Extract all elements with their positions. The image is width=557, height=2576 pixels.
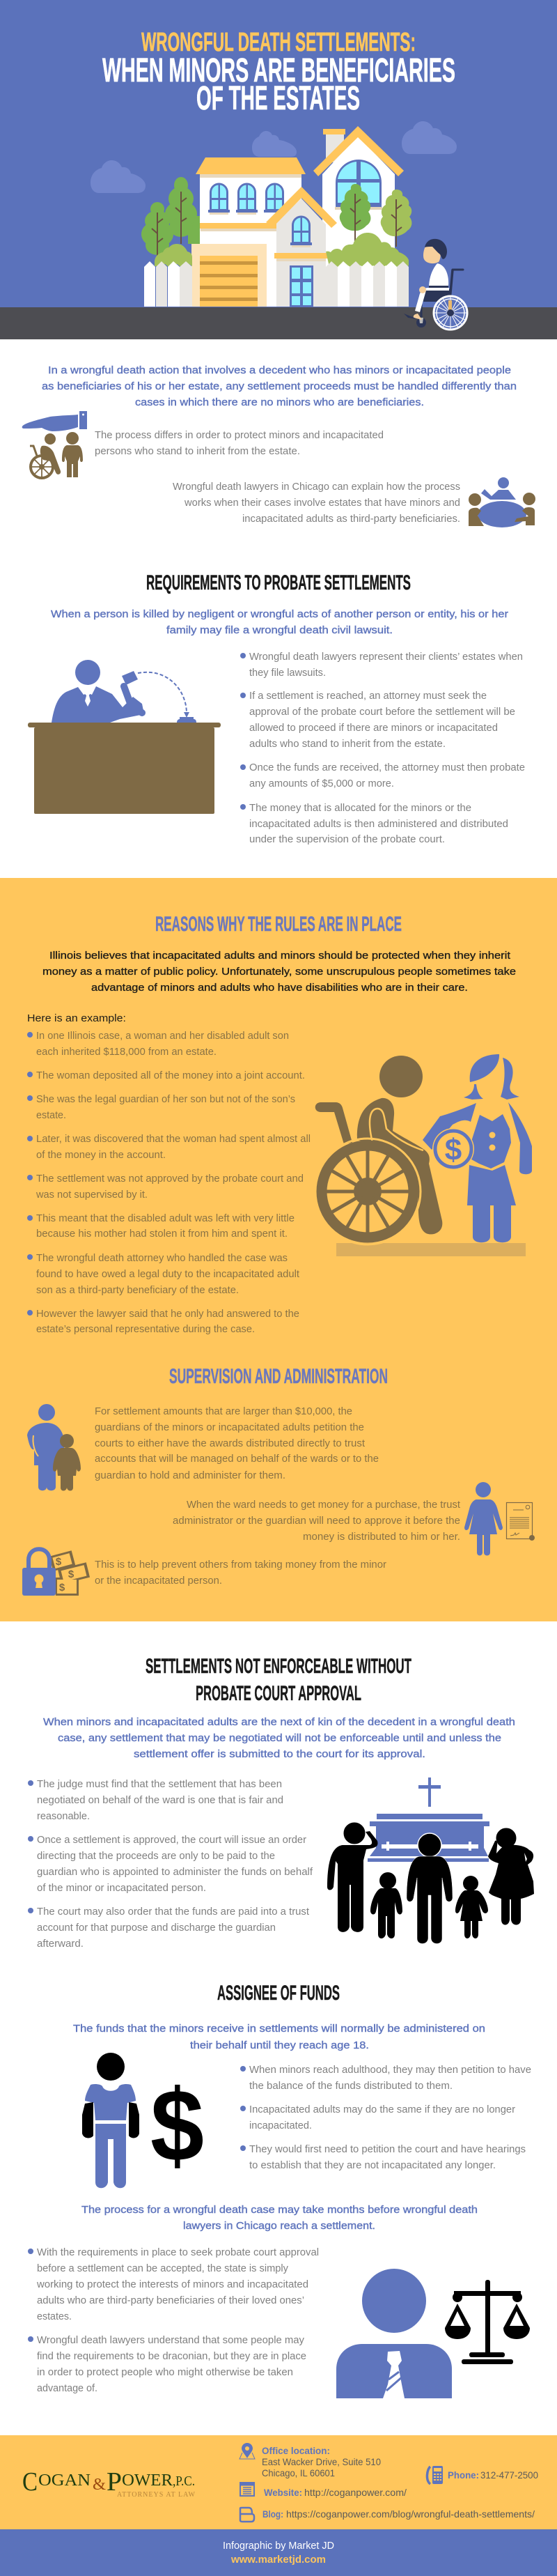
list: requirements: Wrongful death lawyers represent their clients’ estates when xyxy=(249,651,523,663)
road xyxy=(0,307,557,339)
list: adulthood xyxy=(240,2064,531,2171)
child left xyxy=(379,1872,396,1889)
list: adulthood: the balance of the funds distributed to them. xyxy=(249,2080,453,2092)
list: judge must find: account for that purpose and discharge the guardian xyxy=(37,1922,276,1934)
icon: person in wheelchair xyxy=(404,239,467,330)
main roof xyxy=(196,157,306,174)
list: requirements: allowed to proceed if there are minors or incapacitated xyxy=(249,722,498,734)
list: example xyxy=(27,1030,311,1335)
icon: website xyxy=(240,2482,255,2497)
icon: lock and money xyxy=(22,1549,90,1596)
text: website: http://coganpower.com/ xyxy=(304,2487,407,2498)
subheading: funds administered: The funds that the minors receive in settlements will normally be administered on xyxy=(73,2023,485,2035)
list: requirements: any amounts of $5,000 or more. xyxy=(249,778,394,789)
trees and bushes xyxy=(141,177,411,270)
door awning xyxy=(274,253,328,259)
list: example: The woman deposited all of the money into a joint account. xyxy=(36,1070,305,1081)
list: example: each inherited $118,000 from an estate. xyxy=(36,1046,217,1058)
icon: judge at bench xyxy=(28,660,221,814)
icon: blog xyxy=(240,2508,254,2522)
list: judge must find: The court may also order that the funds are paid into a trust xyxy=(37,1906,310,1918)
list: requirements in place: find the requirements to be draconian, but they are in place xyxy=(37,2350,306,2362)
list: example: Later, it was discovered that the woman had spent almost all xyxy=(36,1133,311,1145)
list: adulthood: Incapacitated adults may do the same if they are no longer xyxy=(249,2104,515,2115)
logo: P xyxy=(107,2467,122,2497)
logo: C xyxy=(22,2467,38,2497)
icon: hand protecting family xyxy=(22,411,87,478)
list: requirements in place: adults who are third-party beneficiaries of their loved ones’ xyxy=(37,2295,304,2306)
title xyxy=(102,28,455,117)
icon: lock and money: $ xyxy=(68,1568,74,1580)
text: ward needs money: When the ward needs to get money for a purchase, the trust xyxy=(187,1499,461,1511)
icon: clouds xyxy=(91,121,457,193)
list: example: found to have owed a legal duty to the incapacitated adult xyxy=(36,1268,300,1280)
logo: ,P.C. xyxy=(173,2474,195,2489)
text: phone: 312-477-2500 xyxy=(480,2469,538,2481)
icon: location pin xyxy=(240,2443,255,2459)
list: judge must find: The judge must find that the settlement that has been xyxy=(37,1778,282,1790)
intro statement xyxy=(42,364,517,408)
text: settlement amounts xyxy=(95,1405,379,1481)
man left xyxy=(343,1822,366,1844)
text: lawyers explain xyxy=(173,481,460,525)
man centre xyxy=(418,1833,441,1857)
logo: & xyxy=(93,2476,106,2494)
list: example: She was the legal guardian of her son but not of the son’s xyxy=(36,1093,295,1105)
statement: public policy xyxy=(42,950,516,994)
panel: credit bar xyxy=(0,2529,557,2576)
text: office location: East Wacker Drive, Suite 510 xyxy=(262,2456,381,2467)
man in wheelchair xyxy=(379,1056,423,1097)
list: judge must find: afterward. xyxy=(37,1938,84,1950)
list: example: was not supervised by it. xyxy=(36,1189,148,1201)
list: requirements in place: With the requirements in place to seek probate court approval xyxy=(37,2246,319,2258)
list: requirements: If a settlement is reached, an attorney must seek the xyxy=(249,690,487,702)
windows row xyxy=(208,183,285,215)
wheel xyxy=(315,1139,421,1244)
label: example: Here is an example: xyxy=(27,1012,126,1024)
heading: settlements not enforceable: PROBATE COURT APPROVAL xyxy=(196,1682,361,1705)
icon: phone xyxy=(427,2466,443,2484)
icon: lock and money: $ xyxy=(56,1556,62,1568)
list: example: of the money in the account. xyxy=(36,1149,166,1161)
statement: public policy: Illinois believes that incapacitated adults and minors should be protected when they inherit xyxy=(49,950,511,962)
list: judge must find xyxy=(28,1778,313,1950)
list: judge must find: directing that the proceeds are only to be paid to the xyxy=(37,1850,275,1862)
floor xyxy=(336,1243,526,1256)
text: office location: Chicago, IL 60601 xyxy=(262,2467,335,2478)
subheading: requirements: When a person is killed by negligent or wrongful acts of another person or entity, his or her xyxy=(51,608,508,620)
list: example: estate. xyxy=(36,1109,66,1121)
coffin xyxy=(377,1814,483,1819)
header panel xyxy=(0,0,557,339)
list: adulthood: They would first need to petition the court and have hearings xyxy=(249,2143,526,2155)
door xyxy=(290,265,313,307)
logo xyxy=(22,2467,196,2499)
big window xyxy=(336,160,382,207)
subheading: next of kin: case, any settlement that may be negotiated will not be enforceable until and unless the xyxy=(58,1732,501,1744)
list: requirements: incapacitated adults is then administered and distributed xyxy=(249,818,508,830)
list: requirements: approval of the probate court before the settlement will be xyxy=(249,706,515,718)
text: credit: Infographic by Market JD xyxy=(223,2540,334,2552)
text: ward needs money: administrator or the guardian will need to approve it before the xyxy=(173,1515,460,1527)
text: office location: Office location: xyxy=(262,2445,330,2456)
logo: OGAN xyxy=(38,2471,91,2490)
intro statement: as beneficiaries of his or her estate, any settlement proceeds must be handled differently than xyxy=(42,380,517,392)
body xyxy=(429,263,448,286)
subheading: next of kin: When minors and incapacitated adults are the next of kin of the decedent in a wrongful death xyxy=(43,1716,515,1728)
heading: assignee of funds: ASSIGNEE OF FUNDS xyxy=(217,1982,340,2005)
illustration: house xyxy=(191,126,404,307)
list: example: This meant that the disabled adult was left with very little xyxy=(36,1212,295,1224)
illustration: family at coffin xyxy=(327,1777,534,1944)
gable window xyxy=(292,216,311,243)
text: process differs xyxy=(95,429,384,457)
text: process differs: persons who stand to inherit from the estate. xyxy=(95,445,300,457)
subheading: requirements xyxy=(51,608,508,636)
heading: settlements not enforceable xyxy=(146,1655,411,1705)
text: phone xyxy=(448,2469,538,2481)
woman xyxy=(470,1054,499,1082)
panel: contact footer xyxy=(0,2435,557,2529)
list: requirements in place: advantage of. xyxy=(37,2382,97,2394)
text: blog: https://coganpower.com/blog/wrongful-death-settlements/ xyxy=(286,2508,535,2520)
list: requirements in place: working to protect the interests of minors and incapacitated xyxy=(36,2278,308,2290)
icon: child with dollar: $ xyxy=(150,2069,204,2183)
text: prevent others xyxy=(95,1559,386,1587)
statement: public policy: money as a matter of public policy. Unfortunately, some unscrupulous people sometimes take xyxy=(42,966,516,978)
list: judge must find: reasonable. xyxy=(37,1810,90,1822)
list: requirements in place: before a settlement can be accepted, the state is simply xyxy=(37,2262,288,2274)
text: office location xyxy=(262,2445,381,2478)
list: requirements in place xyxy=(28,2246,319,2394)
statement: public policy: advantage of minors and adults who have disabilities who are in their care. xyxy=(91,982,468,994)
icon: lock and money: $ xyxy=(59,1582,65,1594)
intro statement: cases in which there are no minors who are beneficiaries. xyxy=(135,396,424,408)
subheading: process takes months xyxy=(81,2204,478,2232)
text: lawyers explain: Wrongful death lawyers in Chicago can explain how the process xyxy=(173,481,460,493)
main wall xyxy=(200,174,301,307)
text: settlement amounts: accounts that will be managed on behalf of the wards or to the xyxy=(95,1453,379,1465)
list: example: son as a third-party beneficiary of the estate. xyxy=(36,1284,239,1296)
gable section xyxy=(276,199,326,307)
list: requirements: The money that is allocated for the minors or the xyxy=(249,802,471,814)
panel: reasons and supervision xyxy=(0,878,557,1621)
title: OF THE ESTATES xyxy=(196,80,360,117)
band xyxy=(197,223,276,229)
money bag xyxy=(432,1128,474,1170)
subheading: process takes months: lawyers in Chicago reach a settlement. xyxy=(183,2220,375,2232)
list: example: because his mother had stolen it from him and spent it. xyxy=(36,1228,288,1240)
chimney xyxy=(326,134,344,162)
icon: ward with document xyxy=(464,1482,535,1555)
icon: child with dollar xyxy=(82,2053,204,2188)
logo: ATTORNEYS AT LAW xyxy=(117,2491,196,2499)
icon: guardian and child xyxy=(27,1404,81,1491)
text: credit url: www.marketjd.com xyxy=(230,2554,326,2566)
list: adulthood: incapacitated. xyxy=(249,2120,312,2131)
garage xyxy=(191,244,267,307)
text: settlement amounts: guardian to hold and administer for them. xyxy=(95,1470,285,1481)
text: settlement amounts: courts to either have the awards distributed directly to trust xyxy=(95,1437,366,1449)
list: example: estate’s personal representative during the case. xyxy=(36,1323,255,1335)
subheading: next of kin xyxy=(43,1716,515,1760)
list: requirements xyxy=(240,651,525,845)
list: requirements: Once the funds are received, the attorney must then probate xyxy=(249,762,525,773)
text: lawyers explain: incapacitated adults as third-party beneficiaries. xyxy=(242,513,460,525)
subheading: process takes months: The process for a wrongful death case may take months before wrongful death xyxy=(81,2204,478,2216)
list: adulthood: When minors reach adulthood, they may then petition to have xyxy=(249,2064,531,2076)
text: phone: Phone: xyxy=(448,2469,479,2481)
text: website: Website: xyxy=(264,2487,302,2498)
icon: meeting table xyxy=(469,477,535,527)
intro statement: In a wrongful death action that involves a decedent who has minors or incapacitated people xyxy=(48,364,511,376)
heading: supervision: SUPERVISION AND ADMINISTRATION xyxy=(169,1365,388,1388)
list: example: However the lawyer said that he only had answered to the xyxy=(36,1308,299,1320)
text: prevent others: This is to help prevent others from taking money from the minor xyxy=(95,1559,386,1571)
list: requirements in place: Wrongful death lawyers understand that some people may xyxy=(37,2334,304,2346)
text: lawyers explain: works when their cases involve estates that have minors and xyxy=(184,497,460,509)
list: example: The wrongful death attorney who handled the case was xyxy=(36,1252,288,1264)
list: requirements in place: estates. xyxy=(37,2311,72,2322)
tower wall xyxy=(322,136,395,279)
child right xyxy=(463,1876,478,1891)
illustration: guardian and disabled son xyxy=(315,1054,532,1256)
list: requirements: adults who stand to inherit from the estate. xyxy=(249,738,446,750)
list: requirements in place: in order to protect people who might otherwise be taken xyxy=(37,2366,293,2378)
list: judge must find: of the minor or incapacitated person. xyxy=(37,1882,206,1894)
head xyxy=(423,244,441,263)
icon: lawyer and scales xyxy=(336,2269,530,2398)
text: process differs: The process differs in order to protect minors and incapacitated xyxy=(95,429,384,441)
logo: OWER xyxy=(122,2471,173,2490)
subheading: requirements: family may file a wrongful death civil lawsuit. xyxy=(166,624,393,636)
list: adulthood: to establish that they are not incapacitated any longer. xyxy=(249,2159,496,2171)
subheading: next of kin: settlement offer is submitted to the court for its approval. xyxy=(134,1748,425,1760)
text: ward needs money: money is distributed to him or her. xyxy=(303,1531,460,1543)
list: example: The settlement was not approved by the probate court and xyxy=(36,1173,304,1185)
text: prevent others: or the incapacitated person. xyxy=(95,1575,222,1587)
list: judge must find: negotiated on behalf of the ward is one that is fair and xyxy=(37,1794,283,1806)
text: ward needs money xyxy=(173,1499,461,1543)
text: settlement amounts: guardians of the minors or incapacitated adults petition the xyxy=(95,1421,364,1433)
wheel xyxy=(434,296,467,330)
subheading: funds administered: their behalf until they reach age 18. xyxy=(190,2039,369,2051)
cross xyxy=(418,1777,441,1807)
list: judge must find: Once a settlement is approved, the court will issue an order xyxy=(37,1834,306,1846)
text: settlement amounts: For settlement amounts that are larger than $10,000, the xyxy=(95,1405,352,1417)
text: blog: Blog: xyxy=(262,2508,283,2520)
illustration: guardian and disabled son: $ xyxy=(445,1133,462,1167)
woman right xyxy=(496,1828,517,1849)
list: judge must find: guardian who is appointed to administer the funds on behalf xyxy=(37,1866,313,1878)
list: requirements: under the supervision of the probate court. xyxy=(249,833,445,845)
subheading: funds administered xyxy=(73,2023,485,2051)
fences xyxy=(144,261,409,307)
tower roof xyxy=(313,126,404,176)
list: requirements: they file lawsuits. xyxy=(249,667,326,679)
list: example: In one Illinois case, a woman and her disabled adult son xyxy=(36,1030,289,1042)
